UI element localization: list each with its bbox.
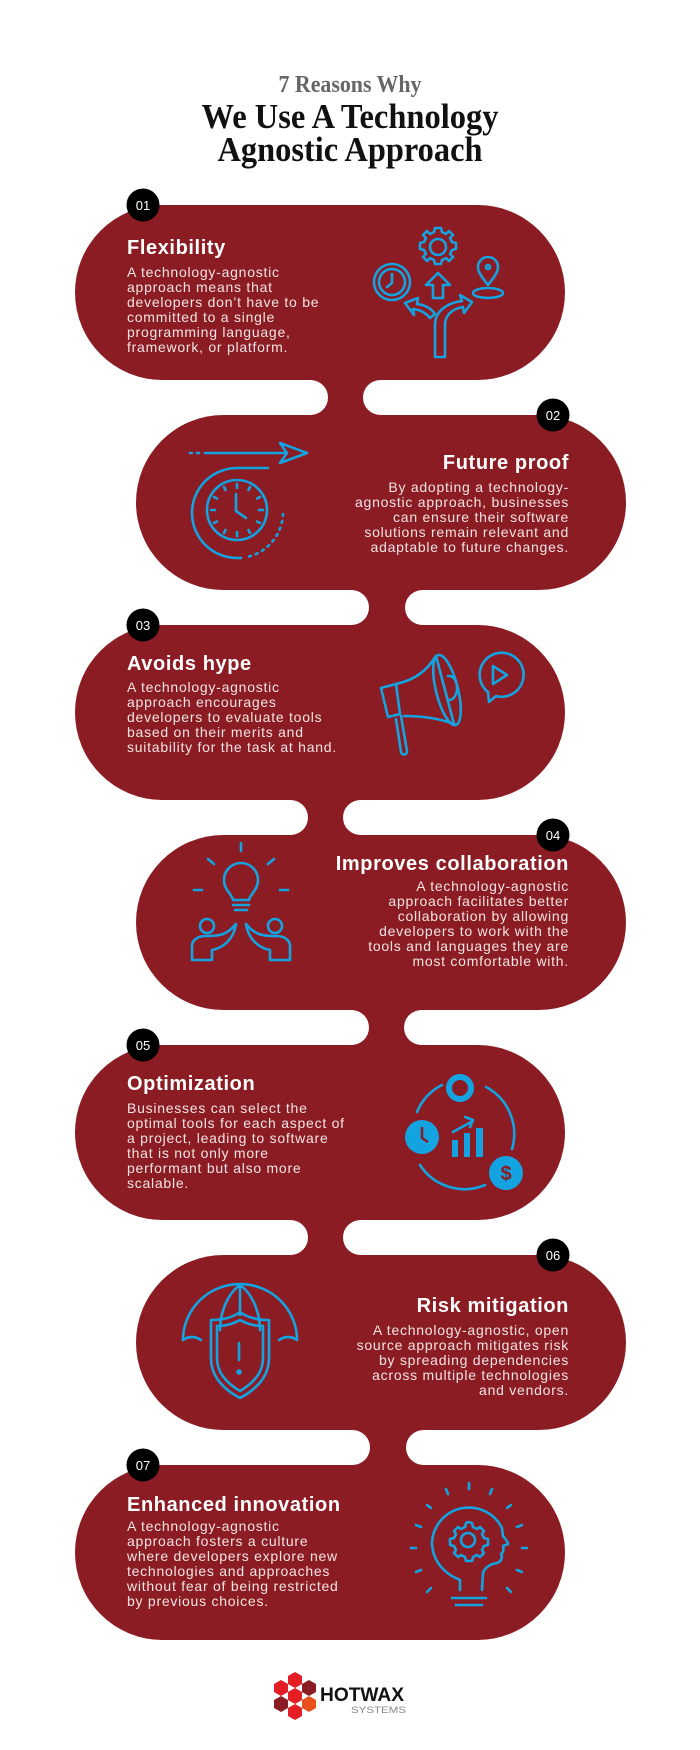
icon: optimization cycle (405, 1077, 523, 1190)
body text: committed to a single (127, 309, 275, 325)
badge 05: 05 (136, 1038, 150, 1053)
title: We Use A Technology (202, 97, 499, 136)
body text: approach fosters a culture (127, 1533, 308, 1549)
logo: hotwax systems: HOTWAX (320, 1685, 404, 1706)
body text: tools and languages they are (368, 938, 569, 954)
body text: developers to work with the (379, 923, 569, 939)
body text: most comfortable with. (412, 953, 569, 969)
body text: developers to evaluate tools (127, 709, 322, 725)
panel: 01 flexibility (75, 188, 565, 380)
body text: without fear of being restricted (126, 1578, 339, 1594)
body text: collaboration by allowing (398, 908, 569, 924)
heading: Flexibility (127, 237, 226, 259)
body text: technologies and approaches (127, 1563, 330, 1579)
panel: 06 risk mitigation (136, 1238, 626, 1430)
icon: clock with arrow (190, 443, 307, 558)
icon: head bulb with gear (411, 1483, 527, 1605)
body text: framework, or platform. (127, 339, 288, 355)
body text: Businesses can select the (127, 1100, 308, 1116)
body text: A technology-agnostic (416, 878, 569, 894)
badge 07: 07 (136, 1458, 150, 1473)
subtitle: 7 Reasons Why (278, 72, 422, 98)
heading: Optimization (127, 1073, 255, 1095)
badge 03: 03 (136, 618, 150, 633)
heading: Risk mitigation (417, 1295, 569, 1317)
badge 04: 04 (546, 828, 560, 843)
body text: a project, leading to software (127, 1130, 328, 1146)
body text: approach encourages (127, 694, 277, 710)
body text: can ensure their software (393, 509, 569, 525)
heading: Improves collaboration (336, 853, 569, 875)
body text: source approach mitigates risk (357, 1337, 569, 1353)
body text: and vendors. (479, 1382, 569, 1398)
body text: suitability for the task at hand. (127, 739, 337, 755)
icon: megaphone (381, 652, 524, 755)
heading: Enhanced innovation (127, 1494, 341, 1516)
body text: where developers explore new (126, 1548, 338, 1564)
panel: 04 improves collaboration (136, 818, 626, 1010)
icon: branching arrows (374, 228, 503, 357)
body text: by previous choices. (127, 1593, 269, 1609)
body text: approach facilitates better (388, 893, 569, 909)
connectors (180, 378, 534, 1468)
panel: 05 optimization (75, 1028, 565, 1220)
badge 06 (536, 1238, 570, 1272)
title (202, 97, 499, 169)
body text: programming language, (127, 324, 291, 340)
body text: A technology-agnostic (127, 264, 280, 280)
body text: optimal tools for each aspect of (127, 1115, 345, 1131)
heading: Avoids hype (127, 653, 252, 675)
badge 02 (536, 398, 570, 432)
badge 02: 02 (546, 408, 560, 423)
icon: optimization cycle: $ (500, 1163, 512, 1185)
heading: Future proof (443, 452, 569, 474)
body text: solutions remain relevant and (364, 524, 569, 540)
body text: By adopting a technology- (388, 479, 569, 495)
panel: 07 enhanced innovation (75, 1448, 565, 1640)
badge 05 (126, 1028, 160, 1062)
logo: hotwax systems: SYSTEMS (351, 1705, 406, 1715)
body text: across multiple technologies (372, 1367, 569, 1383)
badge 04 (536, 818, 570, 852)
icon: umbrella shield (183, 1284, 297, 1398)
body text: developers don’t have to be (127, 294, 319, 310)
badge 06: 06 (546, 1248, 560, 1263)
body text: A technology-agnostic (127, 1518, 280, 1534)
body text: based on their merits and (127, 724, 304, 740)
badge 03 (126, 608, 160, 642)
body text: A technology-agnostic, open (373, 1322, 569, 1338)
badge 01 (126, 188, 160, 222)
badge 01: 01 (136, 198, 150, 213)
body text: performant but also more (127, 1160, 301, 1176)
body text: adaptable to future changes. (371, 539, 569, 555)
body text: agnostic approach, businesses (355, 494, 569, 510)
body text: approach means that (127, 279, 273, 295)
panel: 02 future proof (136, 398, 626, 590)
panel: 03 avoids hype (75, 608, 565, 800)
title: Agnostic Approach (218, 130, 482, 169)
icon: idea and people (192, 843, 290, 960)
body text: that is not only more (127, 1145, 269, 1161)
logo: hotwax systems (274, 1672, 406, 1720)
badge 07 (126, 1448, 160, 1482)
body text: by spreading dependencies (379, 1352, 569, 1368)
body text: A technology-agnostic (127, 679, 280, 695)
body text: scalable. (127, 1175, 189, 1191)
